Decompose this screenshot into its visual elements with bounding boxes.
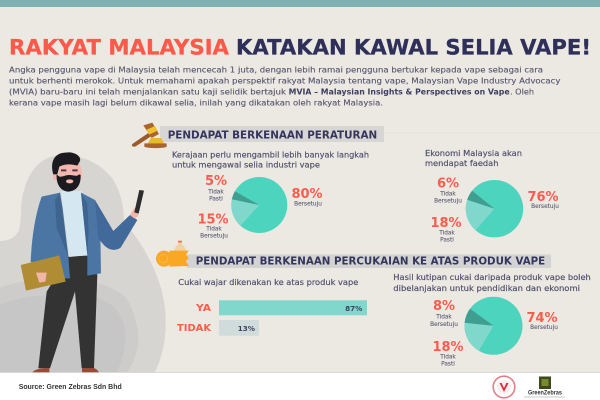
labels: pie 1: Pasti [209, 196, 223, 202]
folder [21, 255, 66, 291]
title [9, 35, 591, 60]
question: hasil kutipan: dibelanjakan untuk pendidikan dan ekonomi [393, 284, 580, 293]
question: hasil kutipan [393, 273, 591, 293]
icon: gavel [132, 123, 167, 148]
labels: pie 2: Tidak [439, 191, 456, 197]
section header: peraturan [160, 126, 600, 142]
labels: pie 2: 76% [527, 190, 559, 205]
intro text block: MVIA – Malaysian Insights & Perspectives on Vape [289, 87, 510, 96]
person holding phone and folder [21, 152, 144, 372]
intro text block: kerana vape masih lagi belum dikawal selia, inilah yang dikatakan oleh rakyat Malaysia. [9, 98, 383, 107]
labels: pie 2: Tidak [438, 230, 455, 236]
pie chart: 76 / 18 / 6 [466, 180, 523, 237]
question: kerajaan: Kerajaan perlu mengambil lebih banyak langkah [172, 151, 369, 160]
labels: pie 1: Tidak [205, 226, 222, 232]
question: hasil kutipan: Hasil kutipan cukai daripada produk vape boleh [393, 273, 591, 282]
labels: pie 2: 18% [430, 216, 462, 231]
pie chart: 80 / 15 / 5 [231, 177, 287, 233]
logo: Green Zebras [524, 376, 565, 397]
labels: pie 2 [430, 176, 559, 243]
labels: pie 3 [430, 299, 558, 367]
top teal band [0, 0, 600, 7]
labels: pie 3: Tidak [435, 314, 452, 320]
question: ekonomi: Ekonomi Malaysia akan [425, 149, 522, 158]
labels: pie 1: Bersetuju [200, 234, 228, 240]
labels: pie 3: Pasti [441, 361, 455, 367]
intro text block: untuk berhenti merokok. Untuk memahami apakah perspektif rakyat Malaysia tentang vape, Malaysian Vape Industry Advocacy [9, 76, 561, 86]
phone [134, 190, 144, 214]
intro text block [9, 66, 561, 107]
question: cukai wajar: Cukai wajar dikenakan ke atas produk vape [178, 278, 359, 287]
raised arm [95, 200, 137, 250]
intro text block: . Oleh [510, 87, 534, 96]
labels: pie 2: Bersetuju [531, 204, 559, 210]
eyes [61, 169, 78, 171]
icon: coins and money bag [156, 241, 189, 267]
section header: percukaian: PENDAPAT BERKENAAN PERCUKAIAN KE ATAS PRODUK VAPE [196, 256, 545, 268]
intro text block: Angka pengguna vape di Malaysia telah mencecah 1 juta, dengan lebih ramai pengguna bertukar kepada vape sebagai cara [9, 66, 543, 75]
labels: pie 3: 18% [432, 340, 464, 355]
background blobs behind figure [0, 155, 166, 372]
labels: pie 3: Bersetuju [530, 325, 558, 331]
hands [36, 207, 139, 283]
mouth [66, 179, 73, 183]
labels: pie 2: 6% [437, 176, 459, 192]
source line: Source: Green Zebras Sdn Bhd [19, 382, 122, 391]
title: RAKYAT MALAYSIA [9, 35, 229, 60]
labels: pie 1: 5% [205, 174, 227, 189]
hair [52, 152, 80, 174]
trousers [38, 256, 97, 368]
ear and face [53, 163, 82, 183]
labels: pie 1: Tidak [207, 189, 224, 195]
labels: pie 3: 74% [526, 311, 558, 326]
labels: pie 2: Pasti [440, 237, 454, 243]
title: KATAKAN KAWAL SELIA VAPE! [236, 35, 591, 60]
labels: pie 3: Bersetuju [430, 322, 458, 328]
labels: pie 1: Bersetuju [294, 201, 322, 207]
bar chart: ya / tidak: TIDAK [177, 323, 212, 334]
shirt [61, 191, 87, 257]
logo: Green Zebras: GreenZebras [528, 390, 563, 396]
jacket lapels [55, 193, 89, 257]
pie chart: 74 / 18 / 8 [464, 297, 522, 355]
labels: pie 1: 15% [197, 212, 229, 228]
labels: pie 1 [197, 174, 323, 240]
beard [57, 174, 81, 192]
bar chart: ya / tidak: YA [195, 303, 212, 314]
shoes [33, 368, 99, 372]
question: kerajaan: untuk mengawal selia industri vape [172, 160, 320, 170]
bar chart: ya / tidak: 87% [345, 304, 362, 313]
bar chart: ya / tidak: 13% [238, 324, 255, 333]
question: ekonomi: mendapat faedah [425, 159, 499, 168]
labels: pie 3: 8% [433, 299, 455, 314]
labels: pie 3: Tidak [439, 354, 456, 360]
labels: pie 1: 80% [291, 187, 323, 202]
section header: peraturan: PENDAPAT BERKENAAN PERATURAN [168, 129, 377, 141]
bar chart: ya / tidak [177, 300, 367, 336]
question: kerajaan [172, 151, 369, 170]
question: ekonomi [425, 149, 522, 168]
intro text block: (MVIA) baru-baru ini telah menjalankan satu kaji selidik bertajuk [9, 87, 287, 96]
jacket [31, 193, 101, 278]
logo: MVIA [493, 376, 515, 398]
labels: pie 2: Bersetuju [434, 198, 462, 204]
